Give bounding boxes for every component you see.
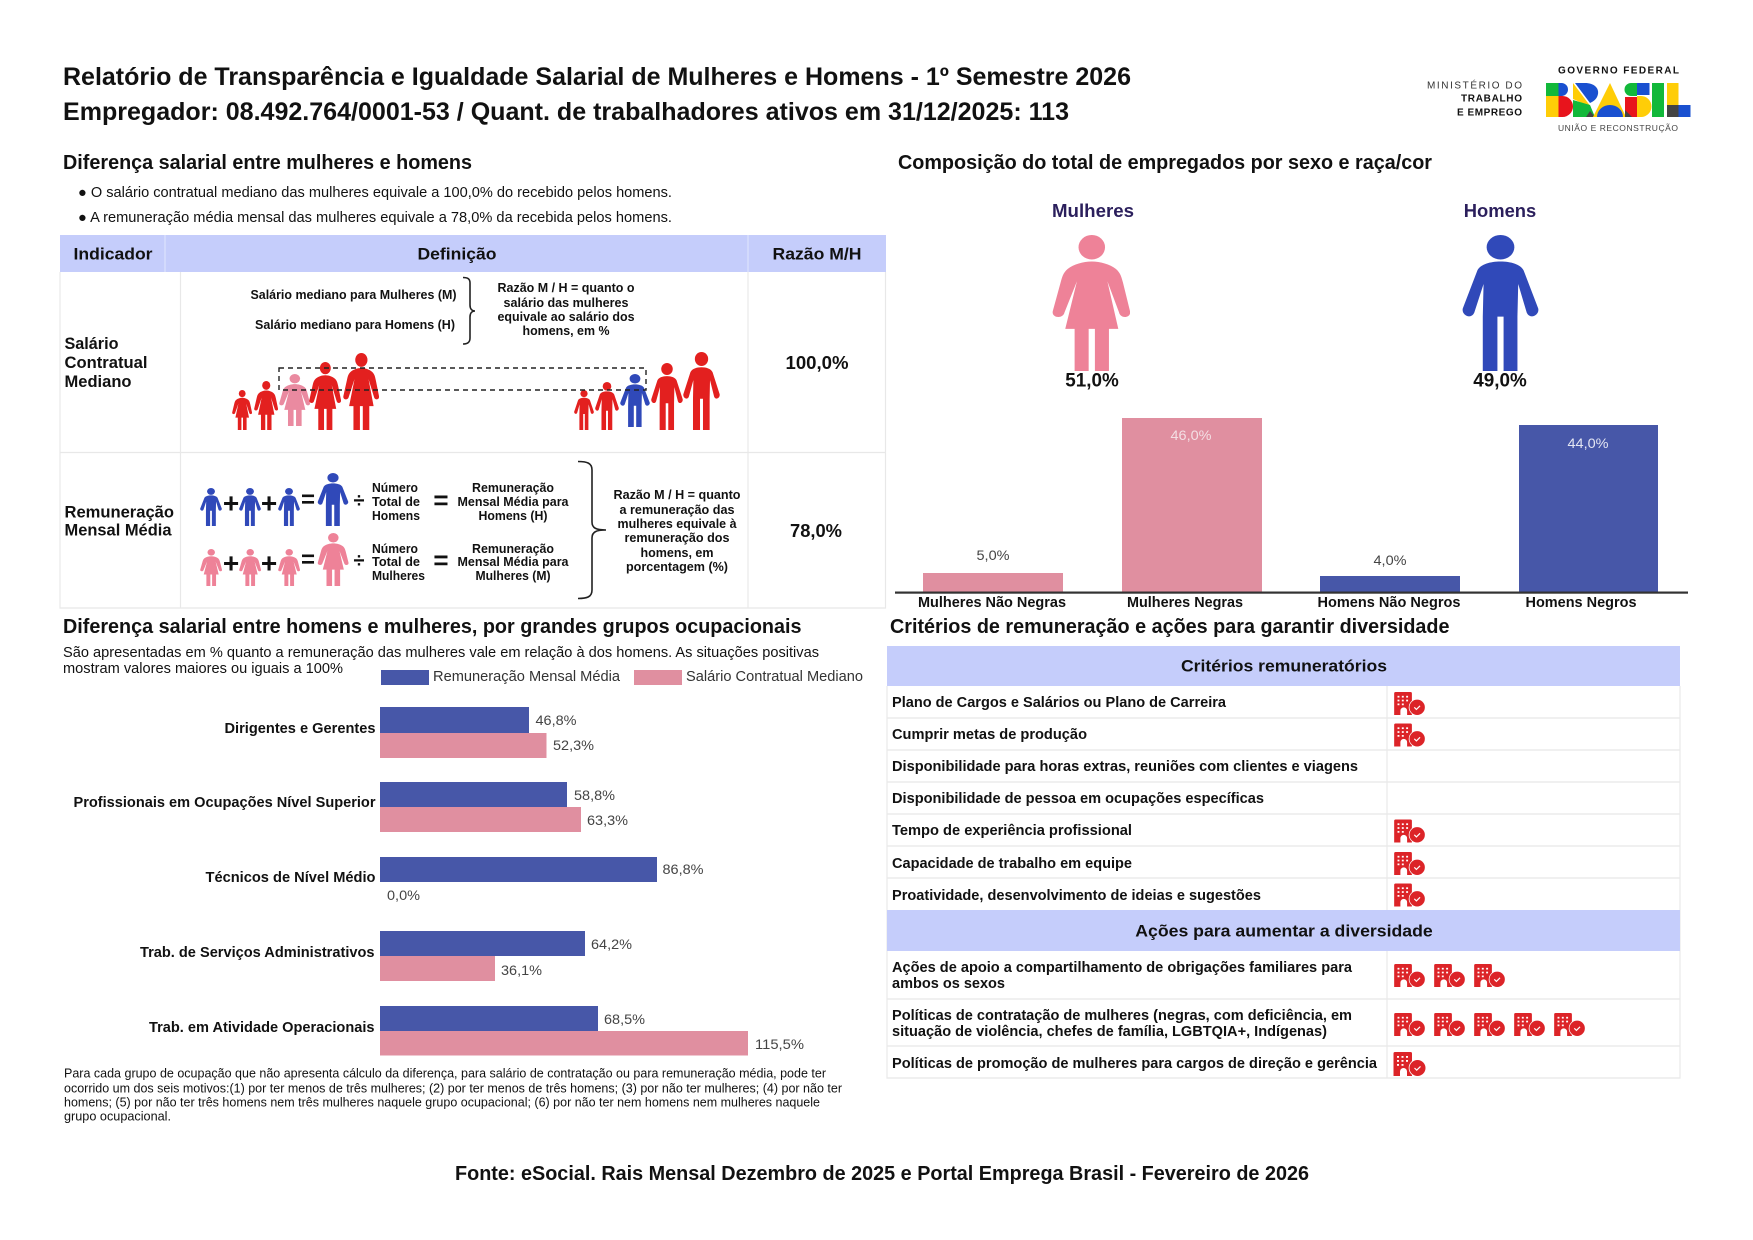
- row: salário contratual mediano: salário das mulheres: [504, 296, 629, 310]
- group: técnicos de nível médio: 86,8%: [662, 861, 704, 877]
- source note: Fonte: eSocial. Rais Mensal Dezembro de 2025 e Portal Emprega Brasil - Fevereiro de 2026: [455, 1163, 1309, 1185]
- bar chart: grupos ocupacionais: [74, 707, 804, 1056]
- icon: women group: [232, 353, 379, 430]
- bar chart: sexo e raça: Mulheres Não Negras: [918, 595, 1066, 611]
- bullet text: [78, 185, 672, 226]
- equation: homens: [200, 473, 570, 526]
- group: serviços administrativos: 64,2%: [591, 936, 632, 952]
- row: remuneração mensal média: 78,0%: [790, 521, 842, 541]
- row: remuneração mensal média: porcentagem (%): [626, 560, 728, 574]
- table header: ações para aumentar a diversidade: [887, 910, 1680, 951]
- heading: Diferença salarial entre mulheres e homens: [63, 152, 472, 174]
- row: contratação de mulheres: Políticas de contratação de mulheres (negras, com deficiência, em: [892, 1008, 1352, 1024]
- equation: mulheres: +: [223, 548, 239, 578]
- row: salário contratual mediano: Mediano: [64, 373, 132, 391]
- row: ocupações específicas: Disponibilidade de pessoa em ocupações específicas: [892, 791, 1264, 807]
- bar chart: sexo e raça: Homens Não Negros: [1318, 595, 1460, 611]
- logo: governo federal brasil: GOVERNO FEDERAL: [1558, 66, 1679, 76]
- row: remuneração mensal média: homens, em: [640, 546, 714, 560]
- row: salário contratual mediano: homens, em %: [522, 324, 610, 338]
- equation: mulheres: =: [301, 546, 315, 574]
- row: remuneração mensal média: remuneração dos: [624, 531, 730, 545]
- row: salário contratual mediano: Contratual: [64, 354, 148, 372]
- equation: mulheres: [200, 533, 570, 586]
- row: proatividade: [892, 884, 1426, 907]
- equation: homens: =: [301, 486, 315, 514]
- equation: homens: Homens (H): [478, 509, 548, 523]
- footnote: ocorrido um dos seis motivos:(1) por ter menos de três mulheres; (2) por ter menos de três homens; (3) por não ter mulheres; (4) por não ter: [64, 1080, 843, 1096]
- row: remuneração mensal média: mulheres equivale à: [618, 517, 737, 531]
- row: obrigações familiares: Ações de apoio a compartilhamento de obrigações familiares para: [892, 960, 1353, 976]
- logo: ministério: E EMPREGO: [1457, 108, 1522, 118]
- logo: ministério: [1427, 78, 1522, 118]
- logo: ministério: MINISTÉRIO DO: [1427, 78, 1522, 92]
- row: horas extras: Disponibilidade para horas extras, reuniões com clientes e viagens: [892, 759, 1358, 775]
- icon: mulheres 51,0%: [1052, 201, 1134, 392]
- bar chart: sexo e raça: Homens Negros: [1526, 595, 1636, 611]
- icon: homens 49,0%: 49,0%: [1473, 370, 1527, 392]
- table header: [60, 235, 886, 272]
- table header: critérios remuneratórios: [887, 646, 1680, 686]
- group: serviços administrativos: [140, 931, 632, 981]
- table header: ações para aumentar a diversidade: Ações para aumentar a diversidade: [1135, 922, 1433, 940]
- equation: homens: Remuneração: [472, 481, 554, 495]
- row: contratação de mulheres: situação de violência, chefes de família, LGBTQIA+, Indígenas): [892, 1024, 1327, 1040]
- bar chart: sexo e raça: 5,0%: [976, 547, 1010, 563]
- icon: homens 49,0%: [1463, 201, 1538, 392]
- row: remuneração mensal média: Mensal Média: [64, 522, 172, 540]
- row: tempo de experiência: Tempo de experiência profissional: [892, 823, 1132, 839]
- row: metas de produção: Cumprir metas de produção: [892, 727, 1087, 743]
- equation: homens: +: [223, 488, 239, 518]
- equation: mulheres: Mulheres (M): [476, 569, 550, 583]
- icon: men group: [574, 352, 720, 430]
- row: salário contratual mediano: [64, 278, 848, 430]
- row: proatividade: Proatividade, desenvolvimento de ideias e sugestões: [892, 888, 1261, 904]
- equation: homens: Total de: [372, 495, 420, 509]
- row: remuneração mensal média: [64, 462, 842, 598]
- row: salário contratual mediano: Salário: [64, 335, 118, 353]
- panel: diferença salarial entre mulheres e homens: [60, 152, 886, 608]
- group: dirigentes e gerentes: [224, 707, 594, 758]
- legend: Salário Contratual Mediano: [686, 669, 863, 685]
- row: promoção de mulheres: [892, 1052, 1426, 1077]
- legend: Remuneração Mensal Média: [433, 669, 621, 685]
- group: técnicos de nível médio: Técnicos de Nível Médio: [206, 870, 376, 886]
- table header: Razão M/H: [772, 244, 862, 264]
- group: técnicos de nível médio: [206, 857, 704, 903]
- panel: critérios de remuneração e diversidade: [887, 616, 1680, 1078]
- bullet text: ● O salário contratual mediano das mulheres equivale a 100,0% do recebido pelos homens.: [78, 185, 672, 201]
- equation: homens: Número: [372, 481, 418, 495]
- group: dirigentes e gerentes: Dirigentes e Gerentes: [224, 721, 376, 737]
- row: remuneração mensal média: a remuneração das: [620, 503, 735, 517]
- group: serviços administrativos: Trab. de Serviços Administrativos: [140, 945, 374, 961]
- footnote: homens; (5) por não ter três homens nem três mulheres naquele grupo ocupacional; (6) por não ter nem homens nem mulheres naquele: [64, 1094, 820, 1110]
- row: plano de cargos: [892, 692, 1426, 716]
- heading: Critérios de remuneração e ações para garantir diversidade: [890, 616, 1450, 638]
- title: Empregador: 08.492.764/0001-53 / Quant. de trabalhadores ativos em 31/12/2025: 113: [63, 98, 1069, 126]
- table header: Indicador: [74, 244, 153, 264]
- bullet text: ● A remuneração média mensal das mulheres equivale a 78,0% da recebida pelos homens.: [78, 210, 672, 226]
- equation: mulheres: Total de: [372, 555, 420, 569]
- logo: governo federal brasil: [1546, 66, 1690, 133]
- group: dirigentes e gerentes: 52,3%: [553, 737, 594, 753]
- row: contratação de mulheres: [892, 1008, 1586, 1040]
- footnote: [64, 1066, 843, 1124]
- equation: homens: +: [261, 488, 277, 518]
- group: atividade operacionais: [149, 1006, 804, 1056]
- group: atividade operacionais: 68,5%: [604, 1011, 645, 1027]
- row: obrigações familiares: ambos os sexos: [892, 976, 1005, 992]
- row: salário contratual mediano: Salário mediano para Mulheres (M): [250, 288, 456, 302]
- bar chart: sexo e raça: 4,0%: [1374, 552, 1406, 568]
- legend: [381, 669, 863, 685]
- group: atividade operacionais: Trab. em Atividade Operacionais: [149, 1020, 374, 1036]
- icon: mulheres 51,0%: Mulheres: [1052, 201, 1134, 221]
- logo: ministério: TRABALHO: [1461, 94, 1522, 104]
- row: promoção de mulheres: Políticas de promoção de mulheres para cargos de direção e gerência: [892, 1056, 1378, 1072]
- group: atividade operacionais: 115,5%: [755, 1036, 804, 1052]
- description text: São apresentadas em % quanto a remuneração das mulheres vale em relação à dos homens. As situações positivas: [63, 645, 819, 661]
- table header: critérios remuneratórios: Critérios remuneratórios: [1181, 656, 1387, 676]
- heading: Diferença salarial entre homens e mulheres, por grandes grupos ocupacionais: [63, 616, 802, 638]
- bar chart: sexo e raça: Mulheres Negras: [1127, 595, 1243, 611]
- row: tempo de experiência: [892, 820, 1426, 843]
- equation: mulheres: ÷: [354, 550, 365, 572]
- group: profissionais nível superior: Profissionais em Ocupações Nível Superior: [74, 795, 376, 811]
- panel: composição por sexo e raça/cor: [895, 152, 1688, 611]
- row: remuneração mensal média: Remuneração: [64, 504, 174, 522]
- row: trabalho em equipe: [892, 852, 1426, 876]
- equation: homens: ÷: [354, 490, 365, 512]
- icon: homens 49,0%: Homens: [1464, 201, 1536, 221]
- equation: mulheres: Mensal Média para: [458, 555, 570, 569]
- icon: mulheres 51,0%: 51,0%: [1065, 370, 1119, 392]
- panel: diferença por grupos ocupacionais: [63, 616, 863, 1124]
- equation: homens: Mensal Média para: [458, 495, 570, 509]
- group: profissionais nível superior: [74, 782, 628, 832]
- group: profissionais nível superior: 58,8%: [574, 787, 615, 803]
- row: salário contratual mediano: Salário mediano para Homens (H): [255, 318, 455, 332]
- group: serviços administrativos: 36,1%: [501, 962, 542, 978]
- equation: homens: =: [433, 485, 449, 515]
- bar chart: sexo e raça: 46,0%: [1170, 427, 1212, 443]
- row: metas de produção: [892, 724, 1426, 747]
- equation: mulheres: +: [261, 548, 277, 578]
- equation: mulheres: =: [433, 545, 449, 575]
- row: plano de cargos: Plano de Cargos e Salários ou Plano de Carreira: [892, 695, 1227, 711]
- row: obrigações familiares: [892, 960, 1506, 992]
- logo: governo federal brasil: UNIÃO E RECONSTRUÇÃO: [1558, 123, 1678, 133]
- bar chart: sexo e raça: [895, 418, 1688, 611]
- equation: homens: Homens: [372, 509, 420, 523]
- table header: Definição: [418, 244, 496, 264]
- equation: mulheres: Mulheres: [372, 569, 425, 583]
- title: [63, 63, 1131, 126]
- footnote: Para cada grupo de ocupação que não apresenta cálculo da diferença, para salário de contratação ou para remuneração média, pode ter: [64, 1066, 827, 1080]
- row: remuneração mensal média: Razão M / H = quanto: [614, 488, 741, 502]
- title: Relatório de Transparência e Igualdade Salarial de Mulheres e Homens - 1º Semestre 2026: [63, 63, 1131, 91]
- footnote: grupo ocupacional.: [64, 1108, 171, 1124]
- row: trabalho em equipe: Capacidade de trabalho em equipe: [892, 856, 1132, 872]
- bar chart: sexo e raça: 44,0%: [1568, 435, 1608, 451]
- heading: Composição do total de empregados por sexo e raça/cor: [898, 152, 1432, 174]
- row: salário contratual mediano: equivale ao salário dos: [498, 310, 635, 324]
- table: indicadores: [60, 235, 886, 608]
- equation: mulheres: Remuneração: [472, 542, 554, 556]
- group: técnicos de nível médio: 0,0%: [387, 887, 420, 903]
- equation: mulheres: Número: [372, 542, 418, 556]
- row: salário contratual mediano: Razão M / H = quanto o: [498, 281, 635, 295]
- description text: [63, 645, 819, 677]
- description text: mostram valores maiores ou iguais a 100%: [63, 661, 343, 677]
- group: dirigentes e gerentes: 46,8%: [536, 712, 576, 728]
- group: profissionais nível superior: 63,3%: [587, 812, 628, 828]
- row: salário contratual mediano: 100,0%: [786, 353, 848, 373]
